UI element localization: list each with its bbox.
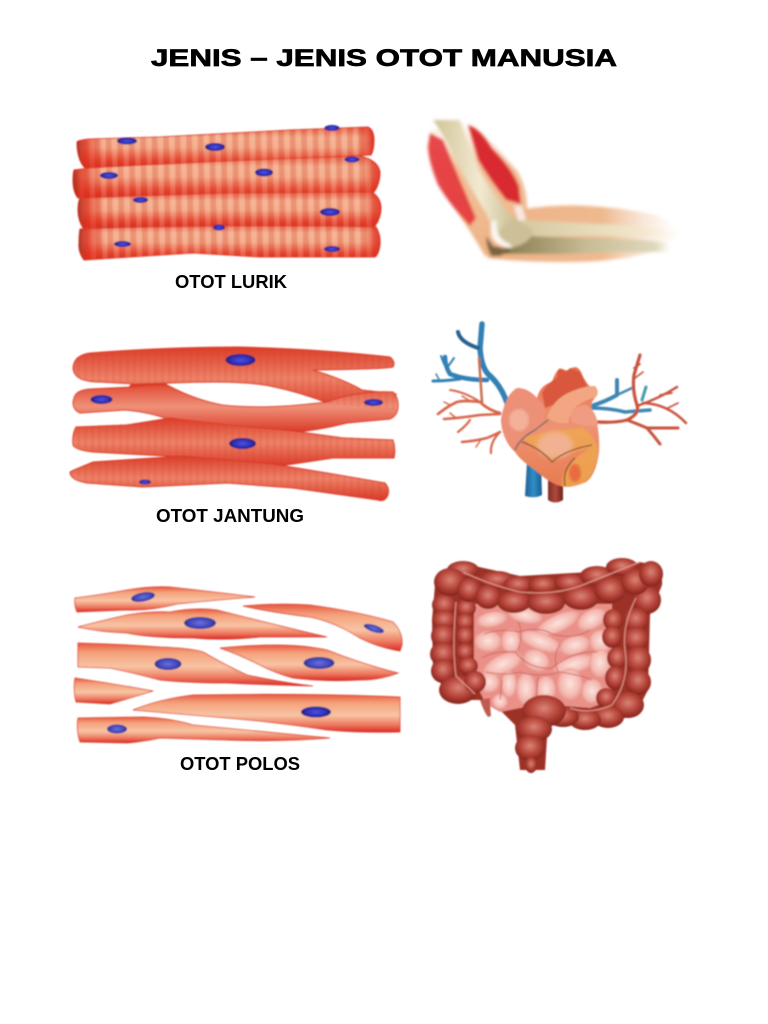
red arteries right xyxy=(598,355,686,444)
taenia bands xyxy=(454,562,640,711)
fibre c xyxy=(73,418,395,467)
colon silhouette xyxy=(432,562,662,770)
elbow joint xyxy=(498,222,533,248)
rectum xyxy=(515,695,566,773)
nuclei xyxy=(90,354,383,484)
coronary lines xyxy=(515,420,592,486)
blue veins right xyxy=(588,380,650,412)
aortic arch xyxy=(547,386,598,423)
fibre bridge xyxy=(125,381,172,392)
ascending colon xyxy=(430,594,486,704)
cell 2 xyxy=(78,609,327,639)
muscle: biceps xyxy=(468,125,521,204)
panel: intestine illustration xyxy=(430,558,663,773)
cell 8 xyxy=(77,717,330,743)
highlight on ventricle xyxy=(537,432,573,458)
cell 4 xyxy=(78,643,313,686)
panel: striated muscle fibres xyxy=(73,125,381,260)
left atrium xyxy=(570,405,598,426)
nuclei xyxy=(100,125,360,252)
fibre 4 xyxy=(79,224,380,260)
fibre 2 xyxy=(73,156,380,198)
appendix xyxy=(480,698,491,717)
panel: cardiac muscle fibres xyxy=(70,347,398,502)
right atrium xyxy=(501,388,546,448)
panel: elbow illustration xyxy=(427,120,680,262)
fibre b xyxy=(73,385,398,433)
upper arm skin xyxy=(427,122,527,256)
title: JENIS – JENIS OTOT MANUSIA xyxy=(151,45,617,72)
fibre d xyxy=(70,456,389,501)
muscle: triceps xyxy=(428,133,476,226)
cell 7 xyxy=(133,694,400,732)
humerus bone xyxy=(433,120,527,242)
heart body xyxy=(501,367,599,487)
red arteries left xyxy=(438,358,500,453)
sigmoid colon xyxy=(547,706,624,730)
joint shadow xyxy=(486,236,512,256)
blue veins left xyxy=(433,324,508,406)
panel: heart illustration xyxy=(433,324,686,502)
hot spot xyxy=(569,464,581,482)
cell 1 xyxy=(75,587,255,612)
fibre 3 xyxy=(78,192,381,228)
small intestine base xyxy=(474,604,612,712)
panel: smooth muscle cells xyxy=(74,587,402,743)
fibre 1 xyxy=(77,127,374,168)
fibre a xyxy=(73,347,396,410)
striations xyxy=(78,375,394,482)
cell 3 xyxy=(243,604,402,651)
small intestine loops xyxy=(474,603,613,710)
descending colon xyxy=(596,586,661,718)
pulmonary trunk xyxy=(542,368,587,408)
forearm skin xyxy=(487,205,680,262)
vena cava xyxy=(525,462,542,497)
cell 5 xyxy=(220,645,398,681)
nuclei xyxy=(107,590,385,734)
transverse colon xyxy=(434,558,663,614)
small intestine folds xyxy=(482,622,598,704)
ulna bone xyxy=(505,236,672,254)
label: otot jantung: OTOT JANTUNG xyxy=(156,506,304,526)
tendon xyxy=(514,206,526,221)
label: otot lurik: OTOT LURIK xyxy=(175,272,287,292)
left ventricle yellow band xyxy=(523,428,598,486)
radius bone xyxy=(520,220,680,238)
cartilage xyxy=(491,220,512,248)
label: otot polos: OTOT POLOS xyxy=(180,754,300,774)
descending aorta xyxy=(548,476,563,502)
cell 6 xyxy=(74,678,153,704)
